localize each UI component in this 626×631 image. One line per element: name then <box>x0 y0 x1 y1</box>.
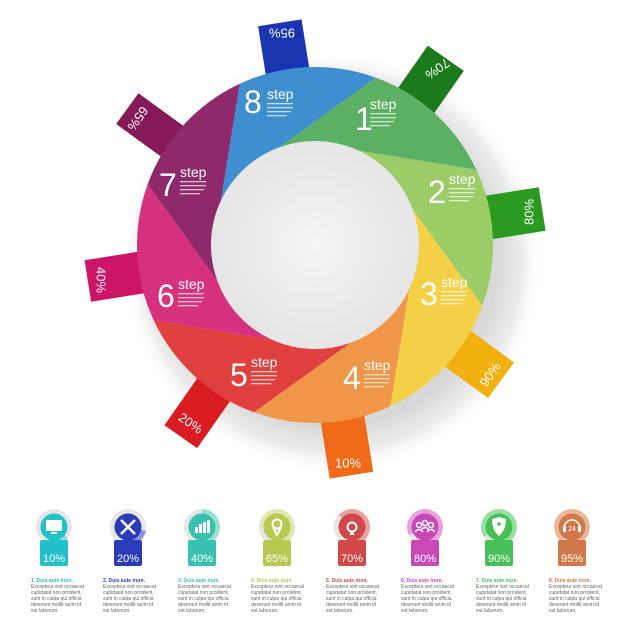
description 4: deserunt mollit anim id <box>251 602 301 608</box>
step 5 label <box>230 354 278 393</box>
bottom row of eight badges <box>36 509 590 566</box>
step 7 label: 7 <box>159 167 177 203</box>
description 2: deserunt mollit anim id <box>103 602 153 608</box>
tab: 10%: 10% <box>335 455 361 470</box>
description 2: cupidatat non proident, <box>103 590 154 596</box>
description 8: est laborum. <box>549 608 577 614</box>
description 8: cupidatat non proident, <box>549 590 600 596</box>
description 4: 4. Duis aute irure. <box>251 578 294 584</box>
description 6: deserunt mollit anim id <box>401 602 451 608</box>
description 1 <box>31 578 85 614</box>
tab: 20%: 20% <box>176 410 206 437</box>
description 2: Excepteur sint occaecat <box>103 584 157 590</box>
description 7: est laborum. <box>476 608 504 614</box>
description 2: est laborum. <box>103 608 131 614</box>
step 1 label: 1 <box>355 101 373 137</box>
tab: 95% <box>258 19 313 100</box>
description 2: 2. Duis aute irure. <box>103 578 146 584</box>
step 7 label <box>159 164 207 203</box>
description 3: Excepteur sint occaecat <box>178 584 232 590</box>
description 8: 8. Duis aute irure. <box>549 578 592 584</box>
segment 7 purple <box>148 84 240 281</box>
description 3: cupidatat non proident, <box>178 590 229 596</box>
description 8 <box>549 578 603 614</box>
segment 4 orange <box>254 289 409 423</box>
description 6 <box>401 578 455 614</box>
description 1: Excepteur sint occaecat <box>31 584 85 590</box>
badge 6: 80%: 80% <box>414 553 436 565</box>
description 6: Excepteur sint occaecat <box>401 584 455 590</box>
segment 1 green <box>279 78 476 170</box>
description 6: cupidatat non proident, <box>401 590 452 596</box>
step 6 label <box>157 276 205 314</box>
description 5: 5. Duis aute irure. <box>326 578 369 584</box>
step 6 label: step <box>178 276 205 292</box>
tab: 65% <box>116 93 205 172</box>
tab: 40%: 40% <box>94 267 109 293</box>
ring segments <box>137 67 493 423</box>
description 5: Excepteur sint occaecat <box>326 584 380 590</box>
description 6: sunt in culpa qui officia <box>401 596 452 602</box>
description 3: est laborum. <box>178 608 206 614</box>
badge 2: 20%: 20% <box>117 553 139 565</box>
description 1: deserunt mollit anim id <box>31 602 81 608</box>
tab: 90% <box>423 315 514 398</box>
description 1: cupidatat non proident, <box>31 590 82 596</box>
description 5: sunt in culpa qui officia <box>326 596 377 602</box>
badge 5: 70% <box>334 509 370 566</box>
step 5 label: 5 <box>230 357 248 393</box>
tab: 80%: 80% <box>521 199 536 225</box>
ring shadow <box>120 50 544 474</box>
step 1 label: step <box>370 96 397 112</box>
step 2 label: step <box>449 171 476 187</box>
step 8 label: step <box>267 86 294 102</box>
step 6 label: 6 <box>157 278 175 314</box>
step 7 label: step <box>180 164 207 180</box>
step 1 label <box>355 96 397 137</box>
description 5: est laborum. <box>326 608 354 614</box>
step 3 label <box>420 274 468 312</box>
badge 4: 65% <box>259 509 295 566</box>
badge 7: 90%: 90% <box>488 553 510 565</box>
description 4: sunt in culpa qui officia <box>251 596 302 602</box>
segment 5 red <box>154 320 351 412</box>
description 8: sunt in culpa qui officia <box>549 596 600 602</box>
badge 3: 40% <box>184 509 220 566</box>
step labels <box>157 84 476 396</box>
description 7 <box>476 578 530 614</box>
description 4: cupidatat non proident, <box>251 590 302 596</box>
description 4: est laborum. <box>251 608 279 614</box>
tab: 70%: 70% <box>422 55 453 83</box>
description 4 <box>251 578 305 614</box>
badge 2: 20% <box>110 509 146 566</box>
description 2: sunt in culpa qui officia <box>103 596 154 602</box>
step 4 label: 4 <box>343 360 361 396</box>
description 1: est laborum. <box>31 608 59 614</box>
description 3 <box>178 578 232 614</box>
segment 8 blue <box>221 67 376 201</box>
description 8: deserunt mollit anim id <box>549 602 599 608</box>
description 6: est laborum. <box>401 608 429 614</box>
badge 8: 95%: 95% <box>561 553 583 565</box>
segment 3 yellow <box>390 209 482 406</box>
step 3 label: step <box>441 274 468 290</box>
step 5 label: step <box>251 354 278 370</box>
step 3 label: 3 <box>420 276 438 312</box>
badge 4: 65%: 65% <box>266 553 288 565</box>
ring center hole <box>209 139 421 351</box>
tabs <box>85 19 546 479</box>
tab: 90%: 90% <box>477 359 504 389</box>
segment 6 pink <box>137 184 271 339</box>
badge 7: 90% <box>481 509 517 566</box>
description 5: cupidatat non proident, <box>326 590 377 596</box>
step 8 label: 8 <box>244 84 262 120</box>
description 7: 7. Duis aute irure. <box>476 578 519 584</box>
tab: 65%: 65% <box>124 104 151 134</box>
badge 3: 40%: 40% <box>191 553 213 565</box>
tab: 80% <box>460 187 546 243</box>
description 1: sunt in culpa qui officia <box>31 596 82 602</box>
step 4 label: step <box>364 357 391 373</box>
tab: 10% <box>317 390 373 479</box>
description 8: Excepteur sint occaecat <box>549 584 603 590</box>
badge 1: 10% <box>36 509 72 566</box>
description 3: deserunt mollit anim id <box>178 602 228 608</box>
badge 5: 70%: 70% <box>341 553 363 565</box>
description 2 <box>103 578 157 614</box>
step 2 label: 2 <box>428 174 446 210</box>
description 7: cupidatat non proident, <box>476 590 527 596</box>
segment 2 light green <box>359 151 493 306</box>
tab: 20% <box>164 356 245 448</box>
description 1: 1. Duis aute irure. <box>31 578 74 584</box>
badge 6: 80% <box>407 509 443 566</box>
bottom descriptions <box>31 578 603 614</box>
description 5 <box>326 578 380 614</box>
description 6: 6. Duis aute irure. <box>401 578 444 584</box>
step 2 label <box>428 171 476 210</box>
badge 1: 10%: 10% <box>43 553 65 565</box>
step 4 label <box>343 357 391 396</box>
description 5: deserunt mollit anim id <box>326 602 376 608</box>
description 3: 3. Duis aute irure. <box>178 578 221 584</box>
step 8 label <box>244 84 294 120</box>
description 7: Excepteur sint occaecat <box>476 584 530 590</box>
badge 8: 95%: 24 <box>568 526 576 533</box>
tab: 40% <box>85 248 170 302</box>
tab: 70% <box>383 46 464 135</box>
description 7: sunt in culpa qui officia <box>476 596 527 602</box>
description 4: Excepteur sint occaecat <box>251 584 305 590</box>
description 3: sunt in culpa qui officia <box>178 596 229 602</box>
description 7: deserunt mollit anim id <box>476 602 526 608</box>
badge 8: 95% <box>554 509 590 566</box>
tab: 95%: 95% <box>269 26 295 41</box>
